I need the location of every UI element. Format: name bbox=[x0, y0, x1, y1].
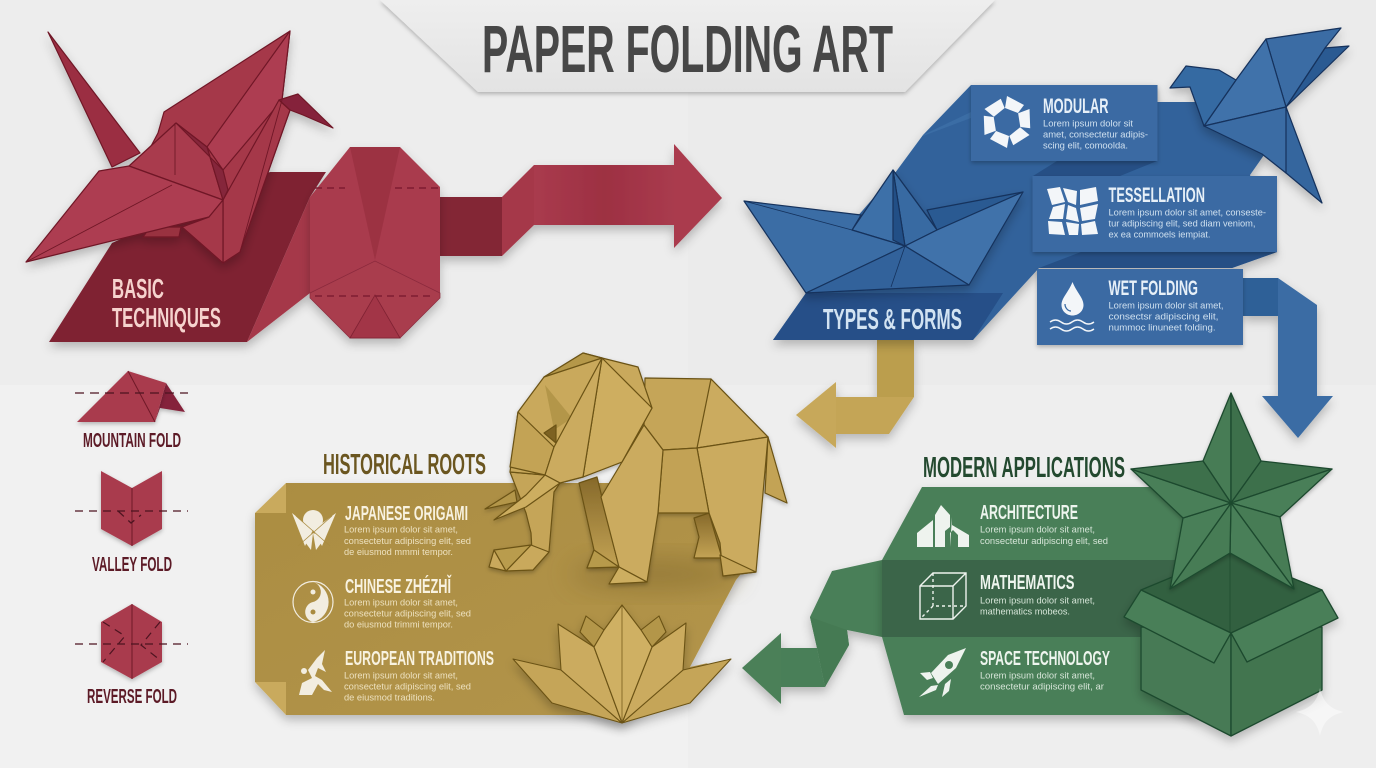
text: chinese zhezhi body bbox=[344, 596, 471, 630]
icon: rocket bbox=[919, 648, 966, 697]
heading: basic techniques: BASIC bbox=[112, 273, 164, 304]
title banner bbox=[380, 0, 995, 92]
text: architecture body bbox=[980, 524, 1108, 546]
folded octagon bbox=[310, 147, 440, 338]
text: japanese origami body: consectetur adipiscing elit, sed bbox=[344, 535, 471, 546]
text: architecture body: Lorem ipsum dolor sit amet, bbox=[980, 524, 1095, 534]
item: japanese origami bbox=[292, 503, 471, 557]
elephant ground shadow bbox=[570, 560, 740, 588]
gold connector arrow bbox=[796, 340, 914, 448]
item: architecture bbox=[917, 502, 1108, 547]
item: space technology bbox=[919, 648, 1110, 697]
blue backing shape bbox=[773, 85, 1277, 340]
card: wet folding: WET FOLDING bbox=[1108, 277, 1198, 300]
item: chinese zhezhi: CHINESE ZHÉZHǏ bbox=[345, 574, 452, 598]
icon: yin yang bbox=[293, 582, 333, 622]
text: chinese zhezhi body: Lorem ipsum dolor sit amet, bbox=[344, 596, 458, 608]
heading: basic techniques bbox=[112, 273, 221, 333]
text: tessellation body: ex ea commoels iempiat. bbox=[1108, 228, 1210, 240]
icon: valley fold bbox=[75, 471, 188, 546]
text: wet folding body: consectsr adipiscing elit, bbox=[1108, 310, 1218, 322]
text: european traditions body: consectetur adipiscing elit, sed bbox=[344, 680, 471, 692]
text: tessellation body bbox=[1108, 206, 1266, 240]
text: wet folding body: Lorem ipsum dolor sit amet, bbox=[1108, 300, 1224, 310]
heading: historical roots: HISTORICAL ROOTS bbox=[323, 449, 486, 481]
text: architecture body: consectetur adipiscing elit, sed bbox=[980, 535, 1108, 546]
text: wet folding body: nummoc linuneet folding. bbox=[1108, 322, 1216, 332]
text: modular body: amet, consectetur adipis- bbox=[1043, 128, 1148, 140]
item: mathematics: MATHEMATICS bbox=[980, 572, 1074, 594]
text: tessellation body: tur adipiscing elit, sed diam veniom, bbox=[1108, 218, 1256, 228]
text: space technology body: Lorem ipsum dolor sit amet, bbox=[980, 670, 1095, 680]
heading: modern applications: MODERN APPLICATIONS bbox=[923, 452, 1125, 484]
icon: origami box bbox=[1124, 553, 1338, 736]
panel: types and forms bbox=[744, 28, 1349, 448]
label: reverse fold: REVERSE FOLD bbox=[87, 686, 177, 708]
red arrow bbox=[440, 144, 722, 256]
icon: origami lotus bbox=[513, 605, 731, 723]
text: space technology body: consectetur adipiscing elit, ar bbox=[980, 680, 1104, 692]
green arrow bbox=[742, 560, 882, 704]
text: european traditions body bbox=[344, 670, 471, 702]
text: modular body: scing elit, comoolda. bbox=[1043, 140, 1128, 150]
icon: modular bbox=[976, 94, 1038, 150]
icon: blue bird bbox=[1170, 28, 1349, 203]
panel: historical roots bbox=[255, 353, 787, 723]
icon: origami crane bbox=[26, 31, 333, 263]
text: japanese origami body: de eiusmod mmmi tempor. bbox=[344, 546, 453, 557]
text: european traditions body: de eiusmod traditions. bbox=[344, 692, 435, 702]
text: chinese zhezhi body: consectetur adipiscing elit, sed bbox=[344, 608, 471, 618]
text: modular body bbox=[1043, 118, 1148, 150]
text: wet folding body bbox=[1108, 300, 1224, 332]
item: space technology: SPACE TECHNOLOGY bbox=[980, 648, 1110, 670]
icon: europe map bbox=[299, 650, 332, 695]
text: european traditions body: Lorem ipsum dolor sit amet, bbox=[344, 670, 458, 680]
gold panel bbox=[255, 483, 752, 723]
item: european traditions bbox=[299, 648, 494, 702]
icon: sparkle watermark bbox=[1296, 688, 1344, 736]
heading: basic techniques: TECHNIQUES bbox=[112, 302, 221, 333]
icon: water drop bbox=[1050, 282, 1094, 331]
item: architecture: ARCHITECTURE bbox=[980, 502, 1078, 524]
text: mathematics body: mathematics mobeos. bbox=[980, 606, 1070, 616]
text: mathematics body: Lorem ipsum dolor sit amet, bbox=[980, 594, 1095, 606]
label: mountain fold: MOUNTAIN FOLD bbox=[83, 430, 181, 452]
icon: building bbox=[917, 505, 969, 547]
icon: reverse fold bbox=[75, 604, 188, 679]
item: chinese zhezhi bbox=[293, 574, 471, 630]
text: tessellation body: Lorem ipsum dolor sit amet, conseste- bbox=[1108, 206, 1266, 218]
label: valley fold: VALLEY FOLD bbox=[92, 554, 172, 576]
item: japanese origami: JAPANESE ORIGAMI bbox=[345, 503, 468, 525]
red banner bbox=[49, 172, 326, 342]
icon: mountain fold bbox=[75, 371, 188, 422]
text: space technology body bbox=[980, 670, 1104, 692]
panel: basic techniques bbox=[26, 31, 722, 342]
text: japanese origami body bbox=[344, 524, 471, 557]
card: wet folding bbox=[1037, 269, 1243, 345]
icon: origami elephant bbox=[485, 353, 787, 584]
card: tessellation: TESSELLATION bbox=[1108, 184, 1205, 207]
icon: origami star bbox=[1131, 393, 1332, 589]
text: japanese origami body: Lorem ipsum dolor sit amet, bbox=[344, 524, 458, 534]
icon: cube bbox=[920, 573, 966, 619]
text: chinese zhezhi body: do eiusmod trimmi tempor. bbox=[344, 618, 453, 630]
blue arrow bbox=[1243, 278, 1333, 438]
card: tessellation bbox=[1032, 176, 1277, 252]
item: european traditions: EUROPEAN TRADITIONS bbox=[345, 648, 494, 670]
icon: tessellation bbox=[1047, 187, 1098, 235]
green panel bbox=[882, 487, 1200, 715]
heading: types and forms: TYPES & FORMS bbox=[823, 304, 962, 336]
item: mathematics bbox=[920, 572, 1095, 619]
panel: fold types bbox=[75, 371, 188, 708]
title: PAPER FOLDING ART bbox=[482, 12, 893, 87]
text: mathematics body bbox=[980, 594, 1095, 616]
text: modular body: Lorem ipsum dolor sit bbox=[1043, 118, 1133, 128]
panel: modern applications bbox=[742, 393, 1338, 736]
card: modular bbox=[971, 85, 1158, 161]
icon: paper boat bbox=[744, 170, 1023, 293]
card: modular: MODULAR bbox=[1043, 95, 1108, 118]
icon: butterfly crest bbox=[292, 510, 336, 550]
